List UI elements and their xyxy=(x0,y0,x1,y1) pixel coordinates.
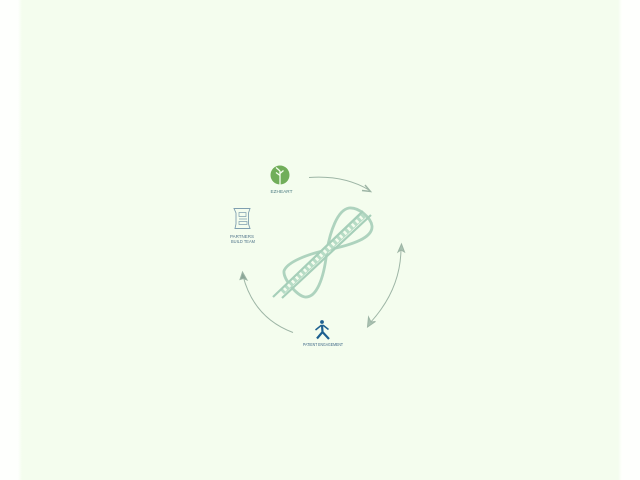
icon: document xyxy=(234,208,250,228)
helix rungs xyxy=(282,215,364,292)
arrow: right to bottom xyxy=(368,244,404,327)
label: top node: EZHEART xyxy=(270,189,293,194)
helix rung gaps xyxy=(284,217,362,290)
helix rails xyxy=(273,211,371,298)
arrow: bottom to left xyxy=(240,272,293,332)
helix loops xyxy=(284,208,372,297)
label: bottom node: PATIENT ENGAGEMENT xyxy=(303,342,343,347)
label: left node: BUILD TEAM xyxy=(231,239,255,244)
icon: walking person xyxy=(316,320,329,339)
label: left node: PARTNERS xyxy=(230,234,254,239)
arrow: top to right xyxy=(309,177,370,192)
label: left node xyxy=(230,234,255,244)
icon: tree in green circle xyxy=(270,166,290,184)
central helix xyxy=(273,208,372,298)
